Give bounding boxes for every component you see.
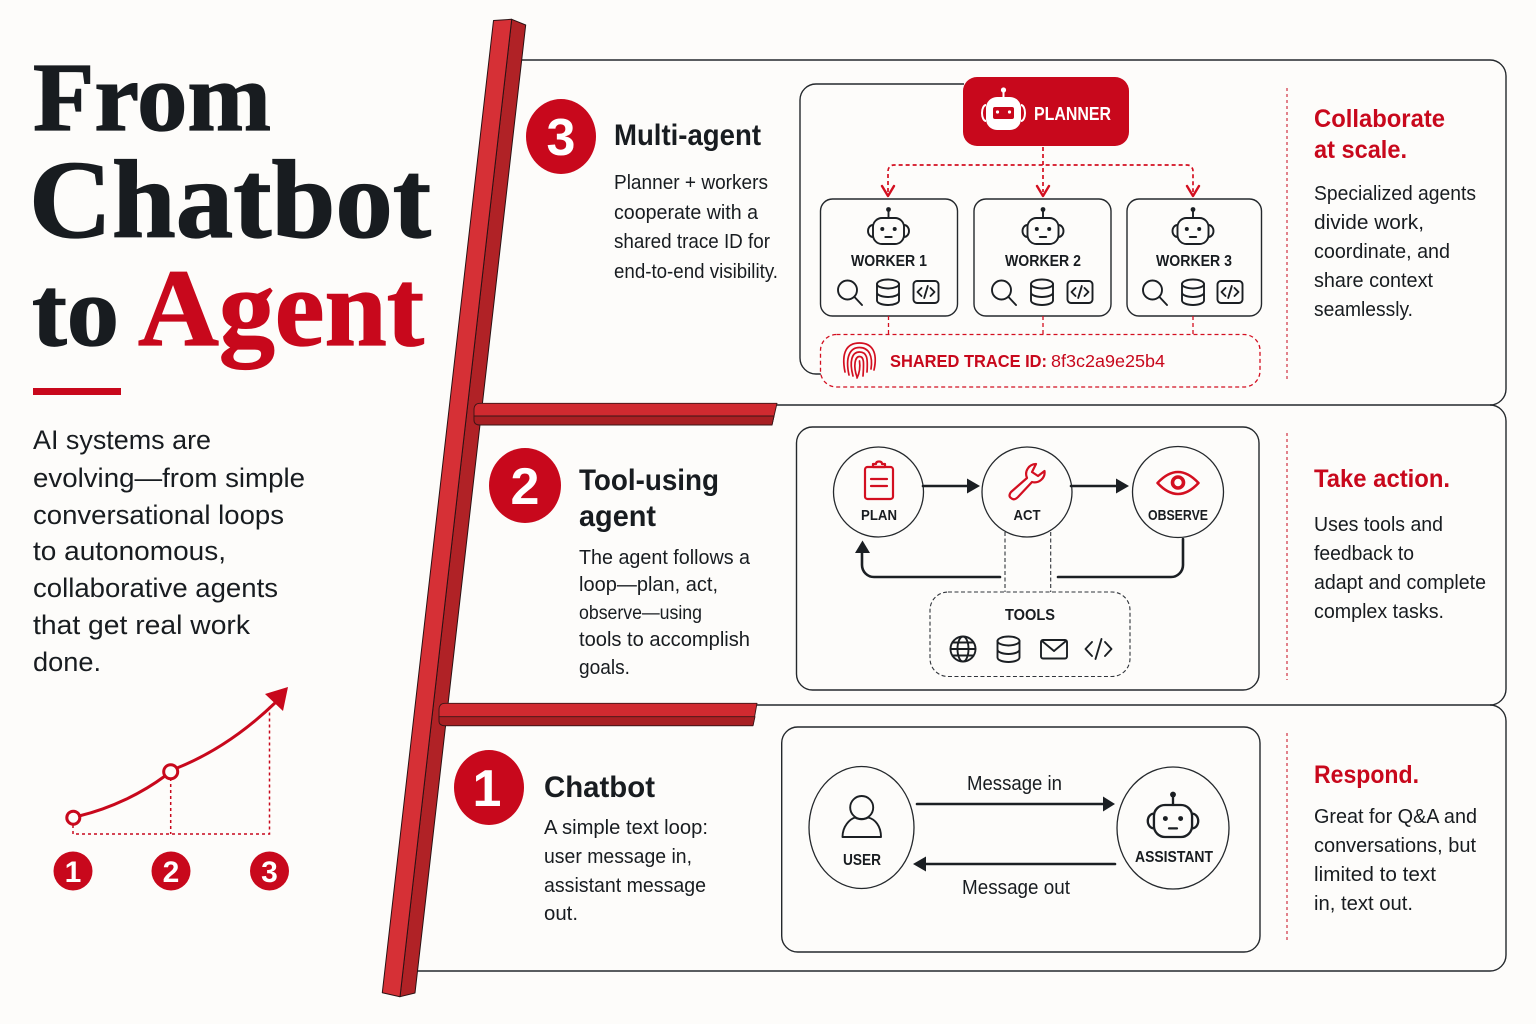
assistant node	[1117, 767, 1229, 889]
intro paragraph: done.	[33, 647, 101, 677]
arrow plan to act	[923, 478, 980, 494]
shared trace id: SHARED TRACE ID:	[890, 351, 1047, 371]
outcome: collaborate at scale: Collaborate	[1314, 105, 1445, 133]
intro paragraph: conversational loops	[33, 500, 284, 530]
outcome: respond	[1314, 761, 1477, 915]
step 3 header: 3	[547, 109, 575, 167]
outcome: collaborate at scale: at scale.	[1314, 136, 1407, 164]
step 1 description: out.	[544, 902, 578, 925]
step 2 header: Tool-using	[579, 464, 719, 497]
worker 1	[820, 199, 958, 316]
step 1 description: A simple text loop:	[544, 816, 708, 839]
step 2 description: observe—using	[579, 603, 702, 624]
step 3 description: shared trace ID for	[614, 230, 770, 253]
step 2 description: tools to accomplish	[579, 628, 750, 651]
user node: USER	[843, 852, 881, 869]
title: to	[32, 256, 119, 367]
plan node	[834, 447, 924, 537]
outcome: take action: adapt and complete	[1314, 571, 1486, 594]
panel outlines	[412, 60, 1506, 971]
step 3 description: Planner + workers	[614, 171, 768, 194]
chatbot diagram	[782, 727, 1260, 952]
planner connectors	[882, 147, 1199, 196]
step 1 header: Chatbot	[544, 771, 655, 804]
message in arrow: Message in	[967, 773, 1062, 795]
message out arrow	[913, 856, 1115, 899]
intro paragraph: that get real work	[33, 610, 251, 640]
intro paragraph	[33, 425, 305, 677]
ladder rail	[382, 19, 526, 997]
outcome: respond: Respond.	[1314, 761, 1419, 789]
shared trace id: 8f3c2a9e25b4	[1051, 351, 1165, 371]
outcome: take action	[1314, 465, 1486, 623]
outcome: collaborate at scale: Specialized agents	[1314, 182, 1476, 205]
step 2 description	[579, 546, 751, 679]
outcome: collaborate at scale: coordinate, and	[1314, 240, 1450, 263]
worker 2	[974, 199, 1111, 316]
intro paragraph: to autonomous,	[33, 536, 226, 566]
outcome: respond: Great for Q&A and	[1314, 805, 1477, 828]
icon: code	[1086, 639, 1112, 659]
arrow head	[265, 687, 288, 711]
tools connector	[1005, 532, 1051, 592]
growth chart: 2	[163, 856, 179, 889]
intro paragraph: evolving—from simple	[33, 463, 305, 493]
step 3 description: end-to-end visibility.	[614, 260, 778, 283]
outcome: take action: Take action.	[1314, 465, 1450, 493]
ladder rung lower	[439, 703, 757, 726]
step 3 description	[614, 171, 778, 283]
step 1 description: assistant message	[544, 874, 706, 897]
title: Chatbot	[29, 139, 431, 262]
message out arrow: Message out	[962, 877, 1070, 899]
observe node	[1132, 446, 1224, 538]
step 1 description: user message in,	[544, 845, 692, 868]
icon: globe	[950, 636, 976, 662]
multi-agent diagram	[800, 77, 1262, 387]
worker 3: WORKER 3	[1156, 253, 1232, 270]
outcome: take action: complex tasks.	[1314, 600, 1444, 623]
step 2 header	[489, 448, 751, 679]
observe node: OBSERVE	[1148, 507, 1208, 524]
dividers	[1286, 88, 1288, 942]
step 3 header	[526, 99, 778, 283]
arrow act to observe	[1071, 478, 1129, 494]
worker 1: WORKER 1	[851, 253, 927, 270]
title: Agent	[138, 247, 424, 369]
step 2 description: The agent follows a	[579, 546, 751, 569]
title	[29, 44, 431, 369]
arrow observe to plan	[855, 539, 1183, 577]
worker 3	[1127, 199, 1262, 316]
planner box	[963, 77, 1129, 146]
message in arrow	[917, 773, 1115, 812]
step 3 header: Multi-agent	[614, 119, 761, 152]
tools box	[930, 592, 1130, 676]
tool-using diagram	[796, 427, 1259, 690]
step 1 header: 1	[473, 760, 501, 818]
icon: mail	[1041, 640, 1067, 658]
outcome: collaborate at scale: seamlessly.	[1314, 298, 1413, 321]
outcome: take action: feedback to	[1314, 542, 1414, 565]
user node	[809, 766, 914, 888]
icon: fingerprint	[844, 343, 875, 378]
step 2 description: goals.	[579, 656, 630, 679]
outcome: respond: conversations, but	[1314, 834, 1476, 857]
outcome: take action: Uses tools and	[1314, 513, 1443, 536]
step 2 description: loop—plan, act,	[579, 573, 718, 596]
step 1 header	[454, 750, 708, 925]
shared trace id	[820, 334, 1260, 387]
outcome: collaborate at scale	[1314, 105, 1476, 321]
act node	[982, 447, 1072, 537]
growth chart	[54, 687, 289, 890]
intro paragraph: collaborative agents	[33, 573, 278, 603]
outcome: collaborate at scale: divide work,	[1314, 211, 1424, 234]
step 3 description: cooperate with a	[614, 201, 759, 224]
outcome: respond: in, text out.	[1314, 892, 1413, 915]
act node: ACT	[1014, 507, 1040, 524]
growth chart: 3	[261, 856, 278, 889]
tools box: TOOLS	[1005, 607, 1055, 624]
assistant node: ASSISTANT	[1135, 849, 1213, 866]
step 2 header: 2	[511, 458, 539, 516]
step 1 description	[544, 816, 708, 925]
title: From	[33, 44, 271, 152]
title rule	[33, 388, 121, 395]
intro paragraph: AI systems are	[33, 425, 211, 455]
outcome: respond: limited to text	[1314, 863, 1436, 886]
growth chart: 1	[65, 856, 81, 889]
plan node: PLAN	[861, 507, 897, 524]
ladder rung upper	[474, 403, 777, 425]
worker 2: WORKER 2	[1005, 253, 1081, 270]
planner box: PLANNER	[1034, 104, 1111, 124]
outcome: collaborate at scale: share context	[1314, 269, 1433, 292]
step 2 header: agent	[579, 500, 656, 533]
